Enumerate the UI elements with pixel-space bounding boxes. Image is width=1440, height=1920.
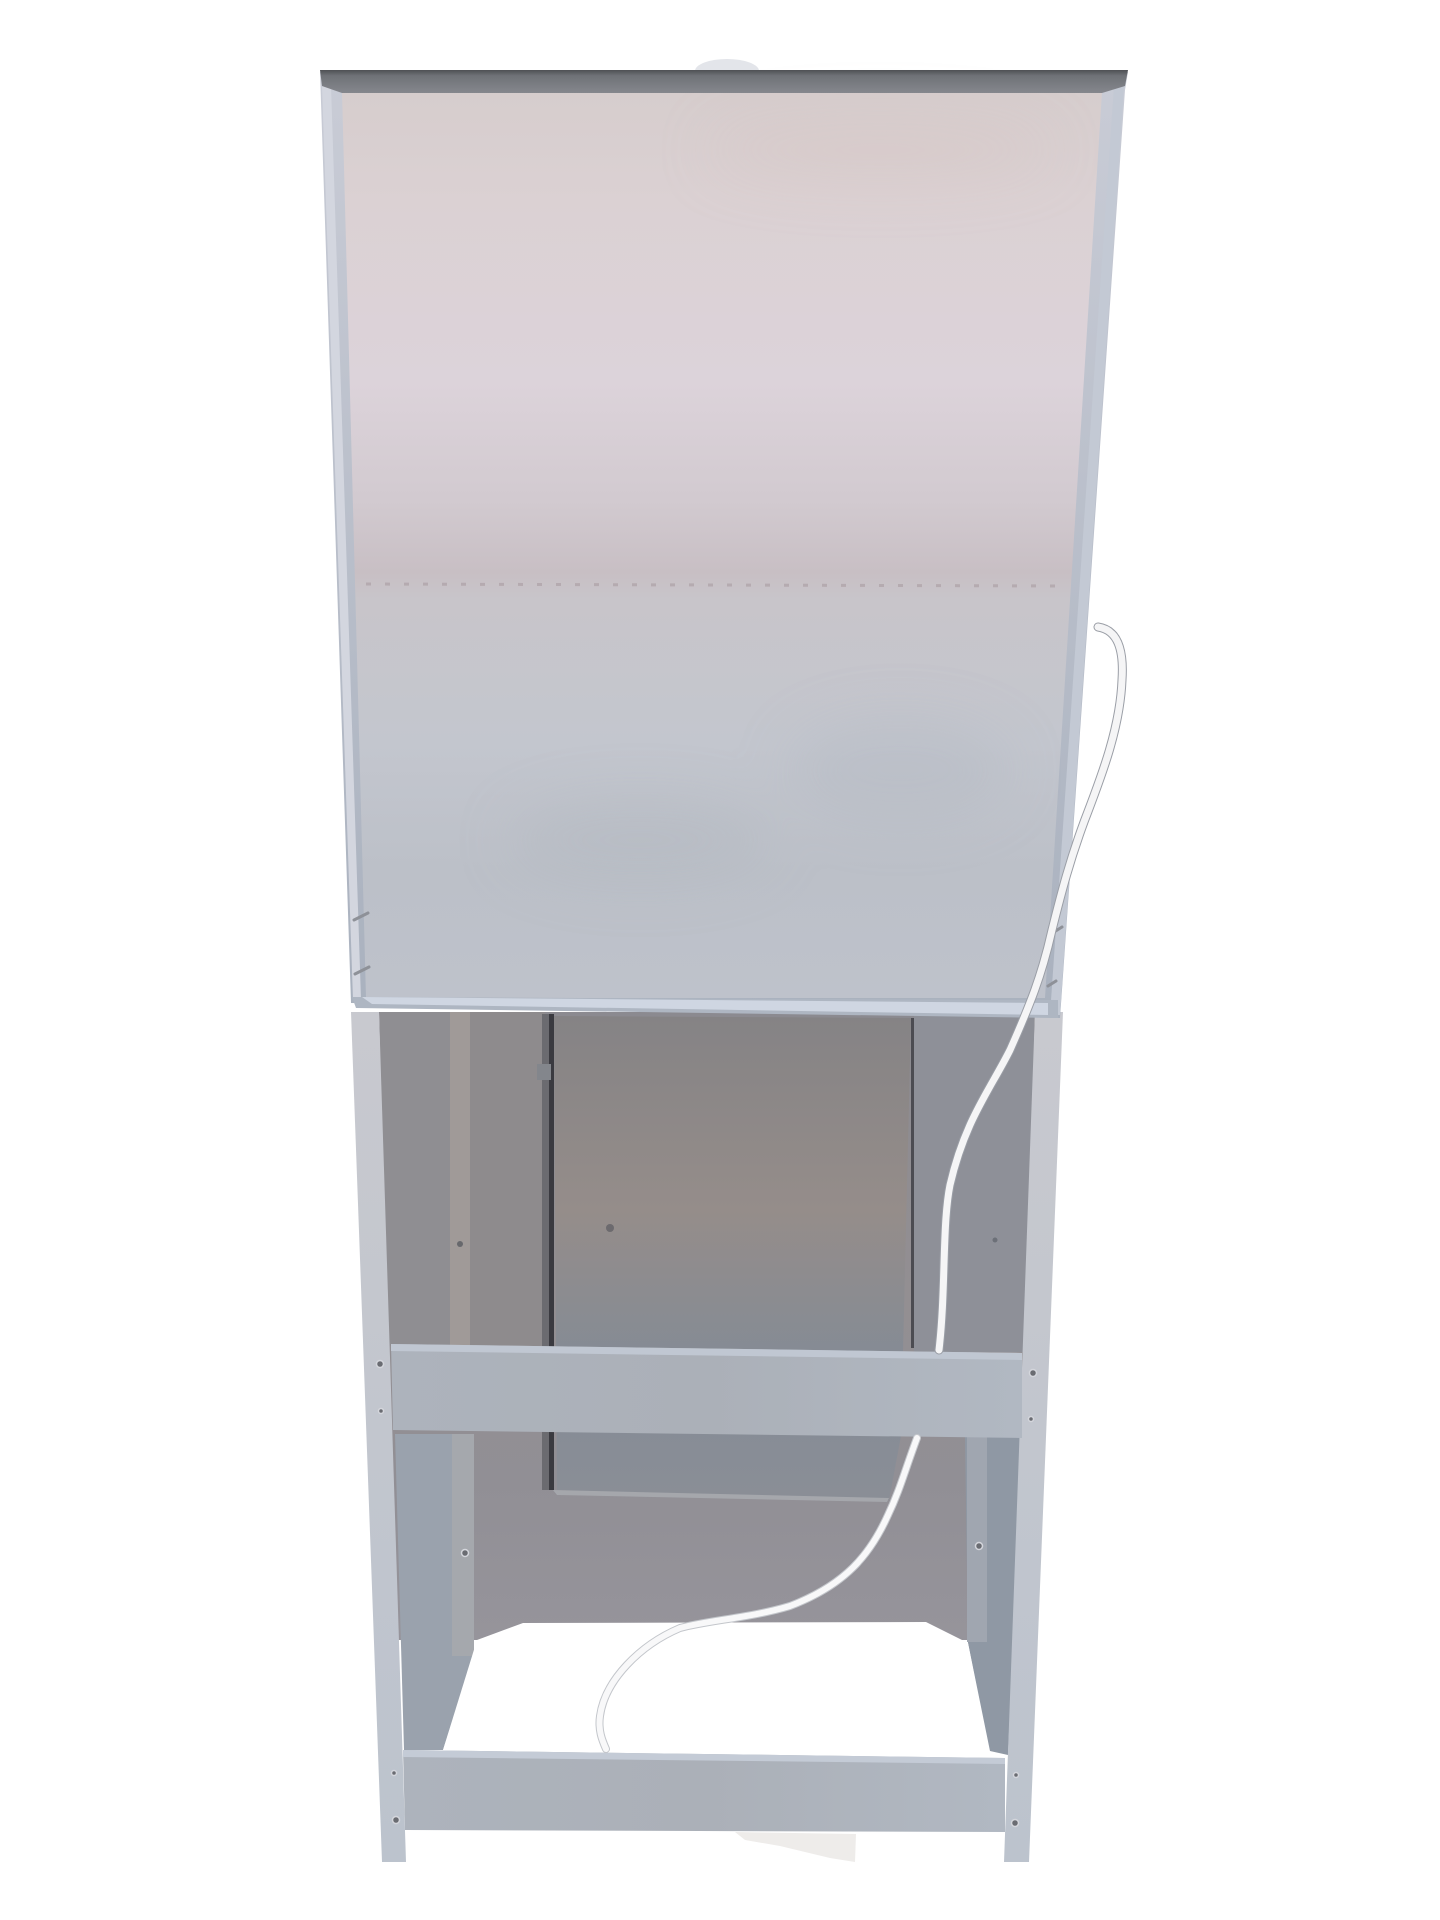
lower crossbar	[403, 1750, 1005, 1832]
interior back wall	[379, 1012, 1035, 1640]
upper panel	[320, 70, 1128, 1018]
upper cable run	[939, 627, 1122, 1350]
lower cable run	[599, 1438, 917, 1749]
right interior column	[914, 1012, 1034, 1755]
centre fold line	[366, 584, 1066, 586]
dome behind top edge	[695, 59, 759, 83]
left post	[351, 1012, 406, 1862]
white power cable	[599, 627, 1122, 1749]
scrap below frame	[735, 1832, 856, 1862]
right flange highlight	[1050, 86, 1124, 1015]
right post	[1004, 1012, 1063, 1862]
bottom opening	[443, 1622, 990, 1755]
rear door panel	[457, 1014, 998, 1502]
top rail	[320, 70, 1128, 93]
upper crossbar	[391, 1344, 1022, 1438]
left flange highlight	[322, 86, 361, 1000]
outer panel shape	[320, 72, 1128, 1018]
frame screws	[376, 1360, 1036, 1826]
panel studs	[354, 913, 1062, 986]
bottom lip	[352, 997, 1058, 1018]
soft shading on face	[510, 120, 1050, 880]
left interior column	[380, 1012, 545, 1750]
lower frame: interior and legs	[351, 1012, 1063, 1862]
panel face	[342, 92, 1102, 998]
